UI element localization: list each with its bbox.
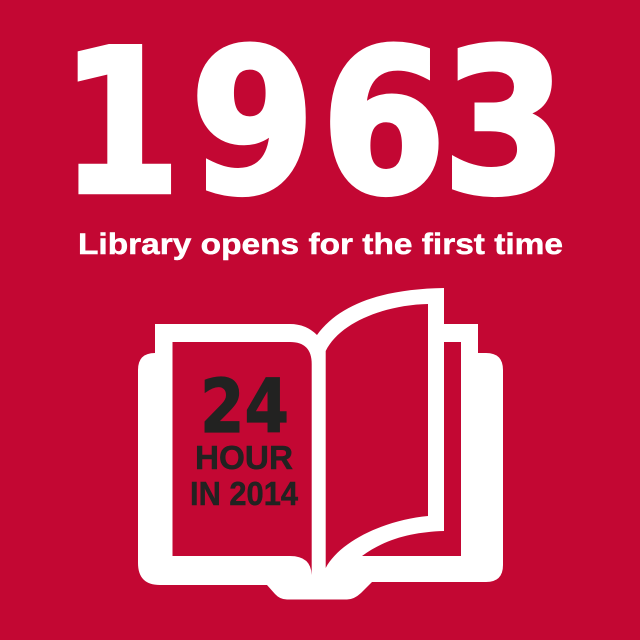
right back page strip bbox=[362, 342, 461, 556]
subtitle: Library opens for the first time bbox=[78, 228, 563, 261]
icon: open book bbox=[138, 288, 503, 600]
title: year 1963: 3 bbox=[442, 6, 567, 239]
book silhouette bbox=[138, 288, 503, 600]
title: year 1963 bbox=[60, 6, 567, 240]
title: year 1963: 1 bbox=[60, 7, 181, 240]
line IN 2014: IN 2014 bbox=[190, 475, 299, 512]
left page bbox=[172, 342, 312, 575]
title: year 1963: 9 bbox=[190, 6, 315, 239]
title: year 1963: 6 bbox=[321, 6, 446, 239]
word HOUR: HOUR bbox=[195, 439, 293, 476]
number 24: 24 bbox=[200, 364, 289, 450]
right turning page bbox=[326, 304, 428, 568]
book label: 24 hour in 2014 bbox=[190, 364, 299, 512]
